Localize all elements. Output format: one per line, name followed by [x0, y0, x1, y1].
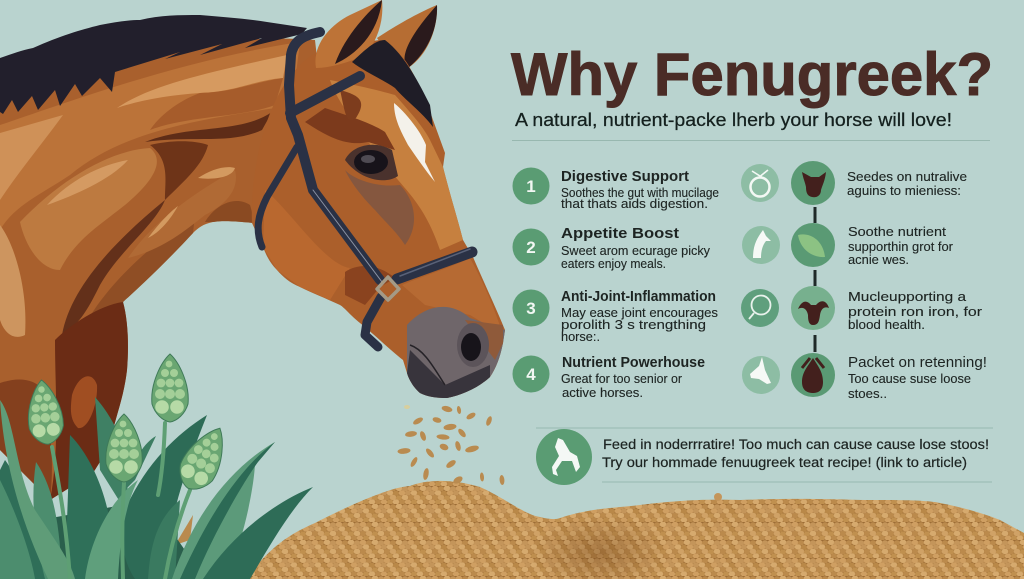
stems — [52, 423, 190, 579]
benefit 2 text: Sweet arom ecurage picky — [561, 243, 710, 258]
benefit 4 text: Nutrient Powerhouse — [562, 355, 705, 371]
benefit 4 — [512, 355, 705, 400]
icon: seed — [791, 353, 835, 397]
benefit 1 text — [561, 169, 719, 211]
number badge 3: 3 — [526, 299, 536, 318]
halter ring — [377, 277, 399, 300]
right column text 1: Seedes on nutralive — [847, 169, 967, 184]
connector lines — [814, 207, 816, 352]
title: Why Fenugreek? — [511, 41, 993, 108]
right column text 2: supporthin grot for — [848, 239, 954, 254]
horse body and neck — [0, 38, 325, 500]
callout text — [602, 437, 989, 470]
icon: seed ring — [741, 164, 779, 202]
benefit 3 text: porolith 3 s trengthing — [561, 317, 706, 332]
number badge 4 — [512, 356, 550, 392]
subtitle: A natural, nutrient-packe lherb your horse will love! — [515, 110, 952, 130]
bud 4 — [172, 420, 236, 497]
benefit 1 text: Digestive Support — [561, 169, 689, 185]
right column text 3: protein ron iron, for — [848, 304, 983, 319]
benefit 3 text: horse:. — [561, 329, 600, 344]
callout text: Feed in noderrratire! Too much can cause cause lose stoos! — [603, 437, 989, 452]
right column text 2 — [848, 224, 954, 267]
icon: horse head spread — [791, 286, 835, 330]
benefit 1 text: Soothes the gut with mucilage — [561, 185, 719, 200]
right column text 3: blood health. — [848, 317, 925, 332]
callout — [536, 428, 993, 485]
benefit 2 text — [561, 226, 710, 271]
number badge 2: 2 — [526, 238, 536, 257]
white blaze — [394, 103, 435, 182]
forelock — [352, 40, 433, 127]
number badge 2 — [512, 228, 550, 266]
icon: horse head dark — [791, 161, 835, 205]
number badge 3 — [512, 290, 550, 326]
right column text 4: stoes.. — [848, 386, 887, 401]
benefit 4 text — [561, 355, 705, 400]
illustration: horse — [0, 0, 505, 500]
right column text 3 — [848, 289, 983, 332]
benefit 3 text — [561, 289, 719, 344]
icon: magnifier — [741, 289, 779, 327]
head shading — [263, 80, 503, 335]
benefit 3 text: May ease joint encourages — [561, 305, 719, 320]
leaves — [0, 397, 313, 579]
illustration: fenugreek plant — [0, 354, 313, 579]
eye — [345, 145, 398, 180]
bud 2 — [152, 354, 188, 422]
divider — [512, 140, 990, 141]
near ear — [315, 0, 382, 68]
right column text 2: acnie wes. — [848, 252, 909, 267]
benefit 4 text: active horses. — [562, 385, 643, 400]
right column text 1: aguins to mieniess: — [847, 183, 961, 198]
benefit 1 text: that thats aids digestion. — [561, 196, 708, 211]
far ear — [377, 5, 437, 68]
bud 1 — [24, 378, 65, 446]
right column text 3: Mucleupporting a — [848, 289, 967, 304]
icon: boot shape — [742, 356, 780, 394]
benefit 1 — [512, 168, 719, 211]
muzzle — [407, 307, 505, 398]
callout text: Try our hommade fenuugreek teat recipe! (link to article) — [602, 455, 967, 470]
right column text 4 — [848, 355, 987, 401]
seed pile patches behind plant — [50, 515, 250, 579]
number badge 4: 4 — [526, 365, 536, 384]
falling seeds — [397, 405, 505, 485]
benefit 3 — [512, 289, 719, 344]
right column text 4: Packet on retenning! — [848, 355, 987, 371]
icon: leaf — [791, 223, 835, 267]
halter — [258, 32, 472, 347]
right column text 1 — [847, 169, 967, 198]
bud 3 — [106, 414, 142, 482]
seed pile — [245, 481, 1024, 579]
icon: rearing horse — [536, 429, 592, 485]
benefit 2 text: eaters enjoy meals. — [561, 256, 666, 271]
benefit 4 text: Great for too senior or — [561, 371, 683, 386]
mane — [0, 15, 307, 114]
head — [252, 40, 505, 398]
right column text 2: Soothe nutrient — [848, 224, 946, 239]
benefit 2 text: Appetite Boost — [561, 226, 679, 242]
benefit 3 text: Anti-Joint-Inflammation — [561, 289, 716, 305]
number badge 1: 1 — [526, 177, 536, 196]
icon: horse neck — [742, 226, 780, 264]
number badge 1 — [512, 168, 550, 204]
benefit 2 — [512, 226, 710, 271]
right column text 4: Too cause suse loose — [848, 371, 971, 386]
